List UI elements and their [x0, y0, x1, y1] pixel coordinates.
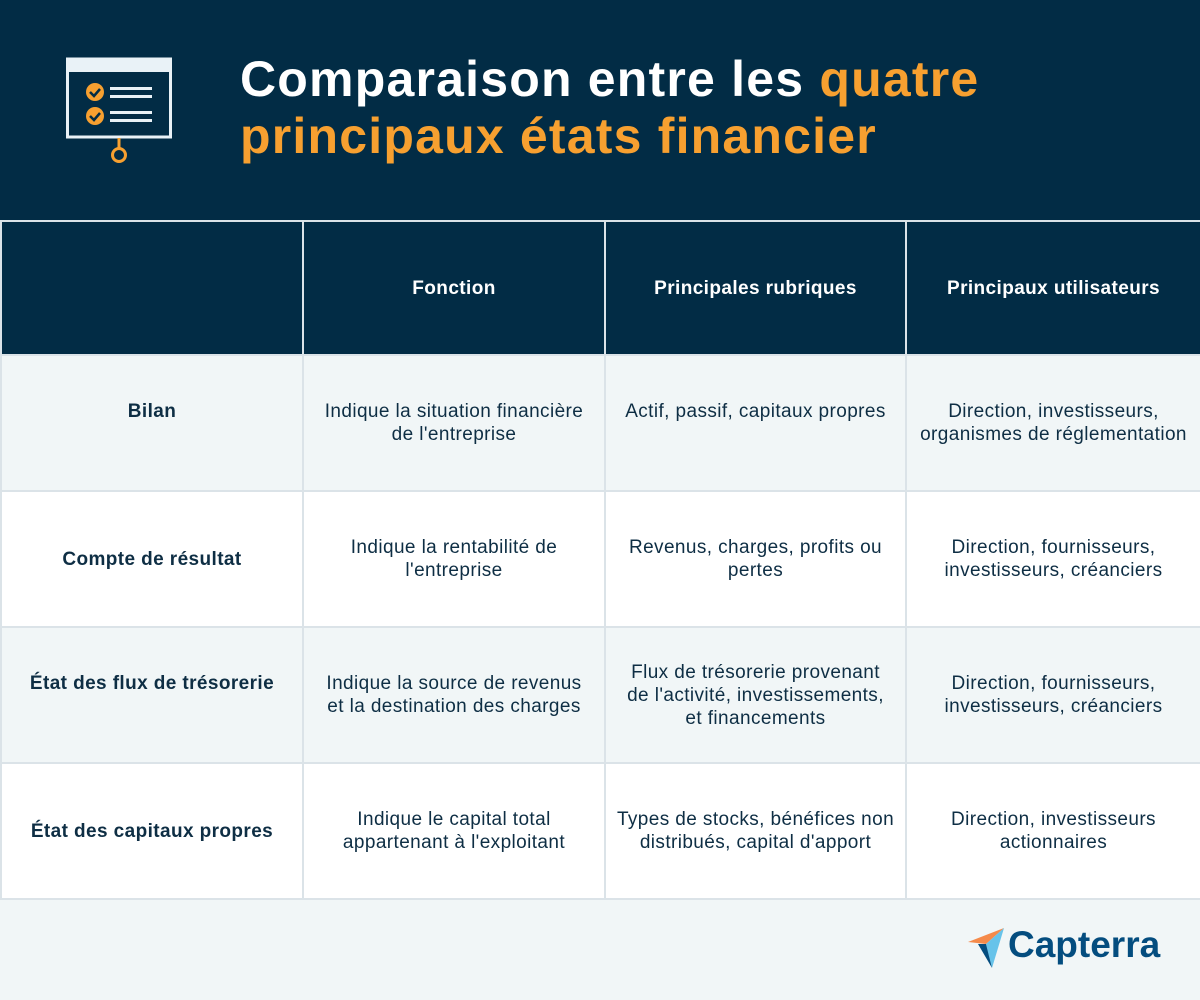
comparison table: Direction, investisseurs [951, 809, 1156, 830]
comparison table: l'entreprise [405, 560, 503, 581]
comparison table: Actif, passif, capitaux propres [625, 401, 886, 422]
comparison table: investisseurs, créanciers [944, 560, 1163, 581]
comparison table: Indique le capital total [357, 809, 551, 830]
comparison table: Direction, investisseurs, [948, 401, 1159, 422]
comparison table: investisseurs, créanciers [944, 696, 1163, 717]
comparison table: distribués, capital d'apport [640, 832, 871, 853]
title: Comparaison entre les quatre [240, 51, 979, 107]
comparison table: Direction, fournisseurs, [952, 673, 1155, 694]
logo: Capterra: Capterra [1008, 924, 1160, 965]
title: principaux états financier [240, 108, 877, 164]
comparison table: Compte de résultat [62, 548, 242, 570]
comparison table: de l'activité, investissements, [627, 684, 884, 706]
comparison table: de l'entreprise [392, 424, 516, 445]
comparison table: Fonction [412, 278, 496, 298]
icon: presentation board [66, 58, 172, 163]
comparison table: Indique la rentabilité de [351, 537, 557, 558]
comparison table: Principales rubriques [654, 278, 857, 298]
header band [0, 0, 1200, 220]
comparison table: Bilan [128, 401, 176, 422]
comparison table: Indique la situation financière [325, 401, 583, 422]
comparison table: Principaux utilisateurs [947, 278, 1160, 298]
comparison table: et la destination des charges [327, 696, 581, 717]
comparison table [0, 220, 1200, 900]
comparison table: pertes [728, 560, 783, 581]
comparison table: Revenus, charges, profits ou [629, 537, 882, 558]
comparison table: organismes de réglementation [920, 424, 1187, 445]
comparison table: État des capitaux propres [31, 820, 273, 842]
comparison table: appartenant à l'exploitant [343, 832, 565, 853]
comparison table: État des flux de trésorerie [30, 673, 274, 694]
comparison table: Indique la source de revenus [326, 673, 582, 694]
comparison table: Direction, fournisseurs, [952, 537, 1155, 558]
title [240, 51, 979, 164]
comparison table: et financements [685, 708, 826, 728]
comparison table: Types de stocks, bénéfices non [617, 809, 894, 830]
comparison table: actionnaires [1000, 832, 1107, 853]
comparison table: Flux de trésorerie provenant [631, 662, 880, 682]
